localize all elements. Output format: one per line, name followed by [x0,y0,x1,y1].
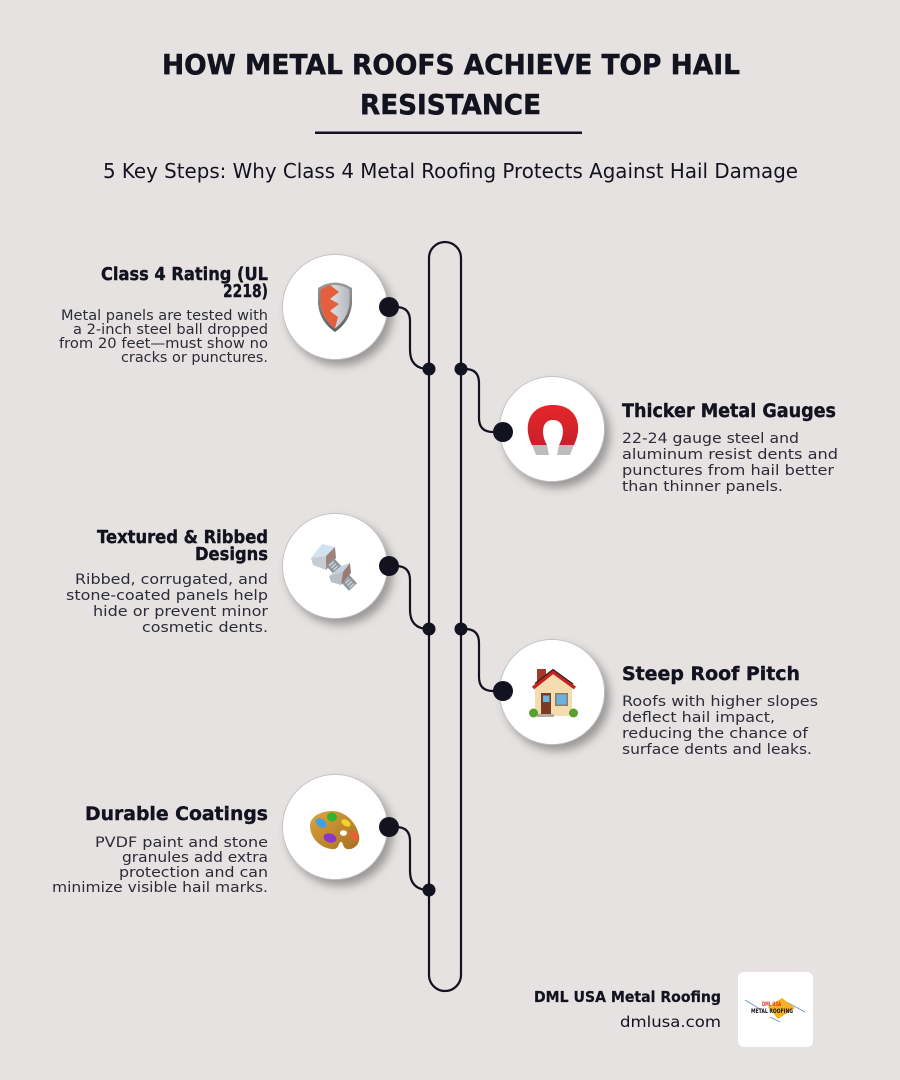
logo: diamond [768,998,795,1019]
title [162,48,740,121]
body 4: deflect hail impact, [622,710,775,726]
heading 5: Durable Coatings [85,803,268,825]
node 1 [422,362,436,376]
connector dot 5 [379,817,399,837]
connector dot 2 [493,422,513,442]
footer brand name: DML USA Metal Roofing [534,988,721,1006]
body 1: cracks or punctures. [121,350,268,366]
body 5: granules add extra [122,850,268,866]
step 5: durable coatings [52,774,436,896]
heading 3: Textured & Ribbed [97,527,268,548]
step 4: steep roof pitch [454,622,818,758]
node 3 [422,622,436,636]
logo: text: DML USA [762,1001,781,1008]
body 2 [622,431,838,495]
body 2: 22-24 gauge steel and [622,431,799,447]
body 1: a 2-inch steel ball dropped [73,322,268,338]
title: HOW METAL ROOFS ACHIEVE TOP HAIL [162,48,740,81]
connector 1 [389,307,429,369]
icon: bolt and nut [311,544,353,587]
connector 3 [389,566,429,629]
connector dot 4 [493,681,513,701]
connector 4 [461,629,503,691]
body 1: Metal panels are tested with [61,308,268,324]
heading 3: Designs [195,544,268,565]
node 4 [454,622,468,636]
step 3: textured and ribbed designs [66,514,436,636]
heading 2: Thicker Metal Gauges [622,400,836,422]
body 5: protection and can [119,865,268,881]
body 3 [66,572,268,636]
body 5 [52,835,268,896]
subtitle: 5 Key Steps: Why Class 4 Metal Roofing Protects Against Hail Damage [103,159,798,183]
body 2: aluminum resist dents and [622,447,838,463]
icon: magnet [528,405,578,455]
icon: house [529,669,578,718]
title: RESISTANCE [360,88,541,121]
icon circle 4 [500,640,604,744]
step 1: class 4 rating [59,254,436,376]
body 3: Ribbed, corrugated, and [75,572,268,588]
connector 5 [389,827,429,890]
icon circle 1 [282,254,388,360]
body 2: than thinner panels. [622,479,783,495]
heading 1: Class 4 Rating (UL [101,264,268,285]
node 2 [454,362,468,376]
logo card [738,972,813,1047]
icon circle 3 [282,514,388,618]
body 1 [59,308,268,366]
body 3: hide or prevent minor [93,604,268,620]
body 1: from 20 feet—must show no [59,336,268,352]
connector 2 [461,369,503,432]
body 4: surface dents and leaks. [622,742,812,758]
heading 1: 2218) [223,281,268,302]
timeline pill [429,242,461,991]
body 2: punctures from hail better [622,463,834,479]
body 5: PVDF paint and stone [95,835,268,851]
body 4 [622,694,818,758]
footer website: dmlusa.com [620,1013,721,1031]
icon: shield [318,282,352,332]
heading 3 [97,527,268,565]
connector dot 1 [379,297,399,317]
body 3: stone-coated panels help [66,588,268,604]
logo card: METAL ROOFING [751,1008,793,1015]
step 2: thicker metal gauges [454,362,838,495]
heading 1 [101,264,268,302]
icon: palette [310,811,360,849]
node 5 [422,884,436,896]
body 5: minimize visible hail marks. [52,880,268,896]
connector dot 3 [379,556,399,576]
body 3: cosmetic dents. [142,620,268,636]
icon circle 2 [500,376,604,482]
title underline [315,132,582,134]
icon circle 5 [282,774,388,880]
logo: roof lines [745,999,805,1022]
heading 4: Steep Roof Pitch [622,663,800,685]
body 4: reducing the chance of [622,726,809,742]
body 4: Roofs with higher slopes [622,694,818,710]
